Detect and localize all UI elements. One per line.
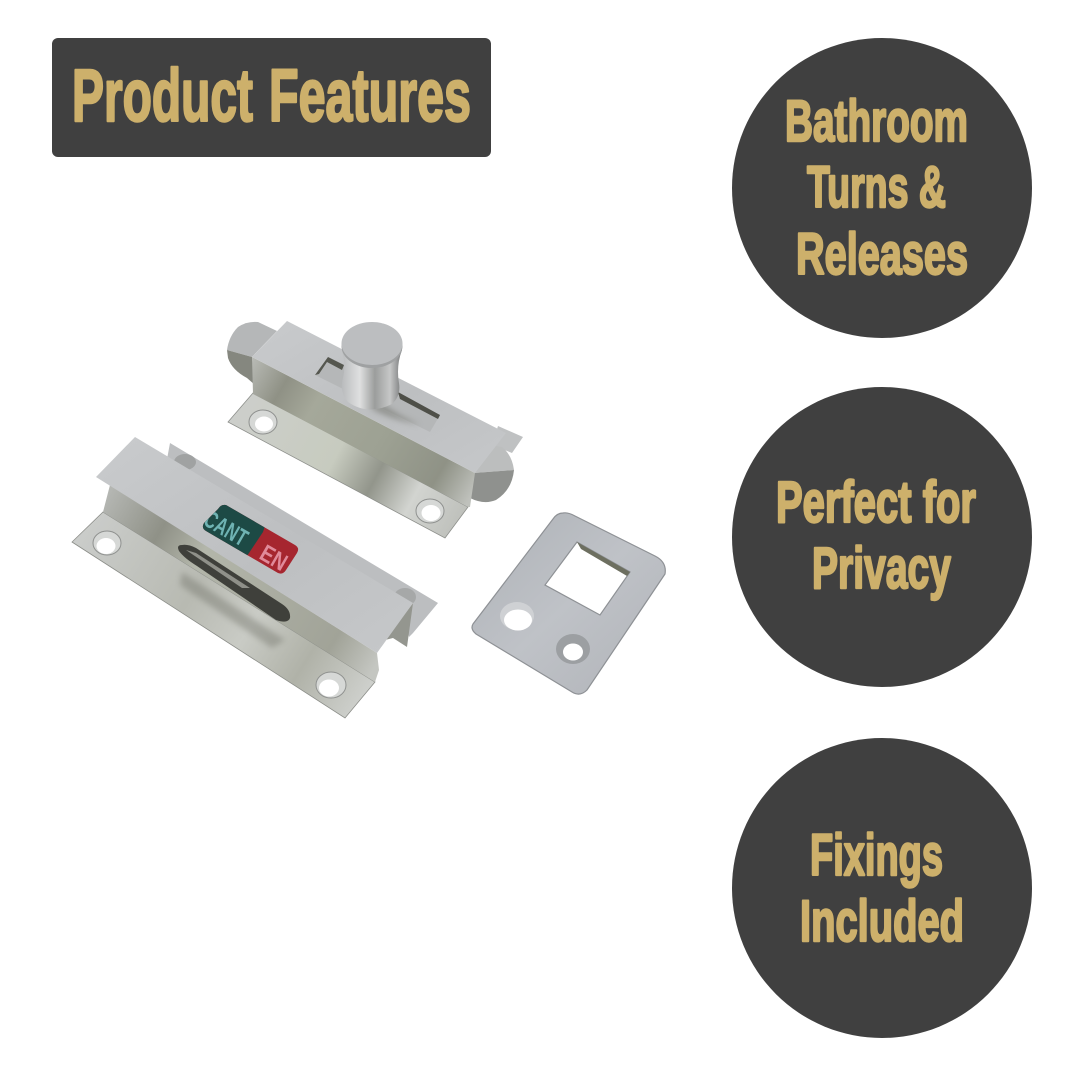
- status window: CANT: [199, 506, 253, 552]
- feature badge: Perfect for Privacy: Privacy: [812, 536, 951, 601]
- feature badge: Fixings Included: Fixings: [810, 823, 943, 888]
- feature badge: Perfect for Privacy: [732, 387, 1032, 687]
- product: strike plate: [472, 513, 665, 694]
- feature badge: Bathroom Turns & Releases: [732, 38, 1032, 338]
- status window: EN: [255, 540, 292, 577]
- feature badge: Perfect for Privacy: Perfect for: [776, 470, 976, 535]
- title banner: [52, 38, 491, 157]
- feature badge: Fixings Included: [732, 738, 1032, 1038]
- side slot: [178, 545, 290, 622]
- bolt screw holes: [249, 410, 444, 523]
- product: slide bolt: [227, 321, 523, 538]
- title text: Features: [269, 54, 471, 137]
- title text: Product: [72, 54, 253, 137]
- smudges: [180, 572, 285, 648]
- bolt knob: [342, 322, 402, 410]
- product: privacy indicator: [72, 437, 438, 718]
- status window: [202, 504, 298, 574]
- indicator screw holes: [93, 531, 346, 698]
- feature badge: Fixings Included: Included: [800, 889, 964, 954]
- feature badge: Bathroom Turns & Releases: Bathroom: [785, 89, 968, 154]
- feature badge: Bathroom Turns & Releases: Turns &: [807, 155, 946, 220]
- feature badge: Bathroom Turns & Releases: Releases: [796, 222, 968, 287]
